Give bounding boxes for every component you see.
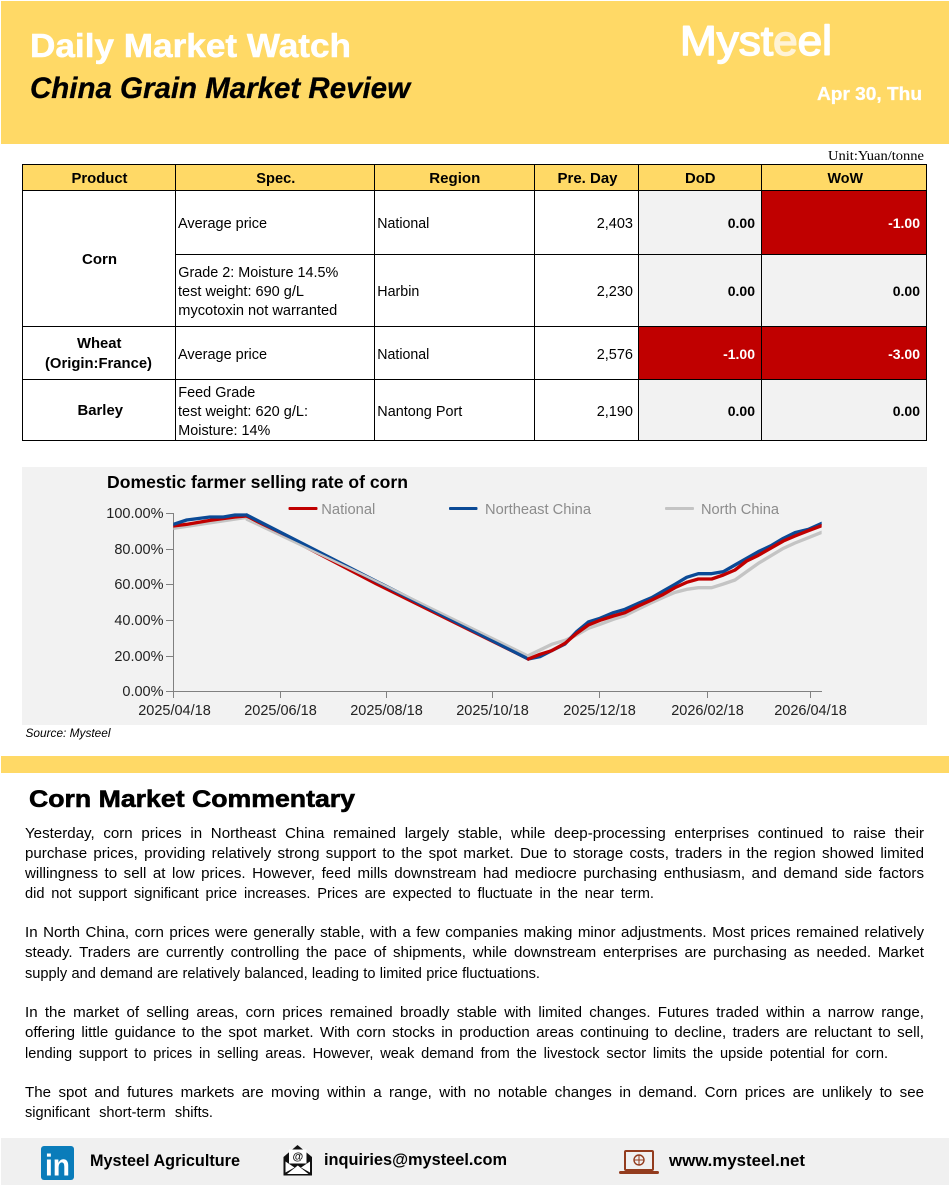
spec column: test weight: 620 g/L: bbox=[178, 404, 308, 420]
y axis labels: 0.00% bbox=[122, 684, 164, 700]
x axis labels: 2025/04/18 bbox=[138, 703, 211, 719]
yellow divider band bbox=[1, 756, 949, 773]
product column bbox=[45, 252, 152, 419]
website address: www.mysteel.net bbox=[668, 1152, 806, 1170]
table header row: Region bbox=[429, 171, 480, 187]
spec column: test weight: 690 g/L bbox=[178, 284, 304, 300]
line: North China, recovery bbox=[528, 532, 822, 656]
chart lines bbox=[173, 515, 822, 659]
line: National, recovery bbox=[528, 526, 822, 659]
commentary text: did not support significant price increases. Prices are expected to fluctuate in the near term. bbox=[25, 886, 654, 902]
day on day changes: -1.00 bbox=[723, 346, 755, 362]
commentary text: In North China, corn prices were generally stable, with a few companies making minor adjustments. Most prices remained relatively bbox=[25, 924, 924, 941]
icon: email envelope bbox=[284, 1145, 312, 1176]
date: Apr 30, Thu bbox=[817, 83, 922, 104]
spec column: mycotoxin not warranted bbox=[178, 303, 337, 319]
spec column: Grade 2: Moisture 14.5% bbox=[178, 265, 338, 281]
day on day changes: 0.00 bbox=[728, 403, 755, 419]
table header row: Pre. Day bbox=[558, 171, 618, 187]
chart legend: National bbox=[321, 502, 375, 518]
line: National, early section bbox=[173, 516, 247, 526]
chart legend: North China bbox=[701, 502, 780, 518]
commentary text: significant short-term shifts. bbox=[25, 1105, 213, 1121]
chart title: Domestic farmer selling rate of corn bbox=[107, 472, 408, 492]
price table bbox=[22, 164, 926, 440]
unit note: Unit:Yuan/tonne bbox=[828, 149, 924, 164]
day on day changes bbox=[723, 215, 755, 419]
footer bar bbox=[1, 1138, 949, 1185]
line: North China, early section bbox=[173, 517, 247, 528]
region column: Harbin bbox=[377, 284, 419, 300]
commentary text: purchase prices, providing relatively strong support to the spot market. Due to storage costs, traders in the region showed limited bbox=[25, 845, 924, 862]
commentary text: In the market of selling areas, corn prices remained broadly stable with limited changes. Futures traded within a narrow range, bbox=[25, 1004, 924, 1021]
table header row: Product bbox=[72, 171, 128, 187]
commentary text: supply and demand are relatively balanced, leading to limited price fluctuations. bbox=[25, 966, 540, 982]
x axis labels: 2025/08/18 bbox=[350, 703, 423, 719]
y axis labels: 60.00% bbox=[114, 577, 164, 593]
region column bbox=[377, 216, 462, 420]
line: Northeast China, early section bbox=[173, 515, 247, 524]
table header row: WoW bbox=[828, 171, 863, 187]
x axis labels: 2026/04/18 bbox=[774, 703, 847, 719]
commentary text: lending support to prices in selling areas. However, weak demand from the livestock sector limits the upside potential for corn. bbox=[25, 1046, 888, 1062]
chart legend: Northeast China bbox=[485, 502, 592, 518]
subtitle: China Grain Market Review: China Grain Market Review bbox=[30, 72, 412, 105]
table header row: Spec. bbox=[256, 171, 295, 187]
x axis labels: 2025/12/18 bbox=[563, 703, 636, 719]
header banner bbox=[1, 1, 949, 144]
x axis labels bbox=[138, 703, 847, 719]
email address: inquiries@mysteel.com bbox=[324, 1151, 507, 1169]
region column: Nantong Port bbox=[377, 404, 462, 420]
product column: Barley bbox=[78, 403, 123, 419]
line: North China, decline bbox=[247, 520, 528, 656]
week on week changes bbox=[888, 215, 920, 419]
product column: Corn bbox=[82, 252, 117, 268]
week on week changes: 0.00 bbox=[893, 403, 920, 419]
panel: corn selling rate chart bbox=[22, 467, 927, 725]
LinkedIn label: Mysteel Agriculture bbox=[90, 1152, 240, 1170]
chart axes bbox=[166, 513, 822, 698]
icon: LinkedIn: in bbox=[45, 1148, 70, 1182]
spec column: Average price bbox=[178, 216, 267, 232]
spec column: Moisture: 14% bbox=[178, 423, 270, 439]
icon: email envelope: @ bbox=[292, 1151, 304, 1163]
region column: National bbox=[377, 347, 429, 363]
commentary text: steady. Traders are currently controlling the pace of shipments, while downstream enterprises are purchasing as needed. Market bbox=[25, 944, 924, 961]
x axis labels: 2025/10/18 bbox=[456, 703, 529, 719]
line: National, decline bbox=[247, 516, 528, 659]
previous day prices: 2,230 bbox=[597, 284, 633, 300]
x axis labels: 2026/02/18 bbox=[671, 703, 744, 719]
week on week changes: 0.00 bbox=[893, 283, 920, 299]
y axis labels bbox=[106, 506, 164, 700]
previous day prices: 2,576 bbox=[597, 347, 633, 363]
commentary text: The spot and futures markets are moving within a range, with no notable changes in demand. Corn prices are unlikely to see bbox=[25, 1084, 924, 1101]
y axis labels: 20.00% bbox=[114, 649, 164, 665]
day on day changes: 0.00 bbox=[728, 215, 755, 231]
y axis labels: 80.00% bbox=[114, 542, 164, 558]
day on day changes: 0.00 bbox=[728, 283, 755, 299]
region column: National bbox=[377, 216, 429, 232]
table header row bbox=[22, 164, 926, 190]
y axis labels: 40.00% bbox=[114, 613, 164, 629]
product column: (Origin:France) bbox=[45, 356, 152, 372]
chart legend bbox=[288, 502, 780, 518]
table header row: DoD bbox=[685, 171, 716, 187]
line: Northeast China, recovery bbox=[528, 523, 822, 659]
title: Daily Market Watch: Daily Market Watch bbox=[30, 27, 351, 64]
spec column: Average price bbox=[178, 347, 267, 363]
change cell backgrounds bbox=[638, 190, 926, 440]
chart source: Source: Mysteel bbox=[26, 726, 111, 740]
previous day prices bbox=[597, 216, 633, 420]
commentary text: willingness to sell at low prices. However, feed mills downstream had mediocre purchasing enthusiasm, and demand side factors bbox=[25, 865, 924, 882]
icon: website laptop bbox=[620, 1151, 658, 1174]
y axis labels: 100.00% bbox=[106, 506, 164, 522]
spec column: Feed Grade bbox=[178, 385, 255, 401]
commentary text: offering little guidance to the spot market. With corn stocks in production areas continuing to decline, traders are reluctant to sell, bbox=[25, 1024, 924, 1041]
previous day prices: 2,403 bbox=[597, 216, 633, 232]
week on week changes: -3.00 bbox=[888, 346, 920, 362]
spec column bbox=[178, 216, 338, 439]
x axis labels: 2025/06/18 bbox=[244, 703, 317, 719]
product column: Wheat bbox=[77, 336, 122, 352]
week on week changes: -1.00 bbox=[888, 215, 920, 231]
commentary heading: Corn Market Commentary bbox=[29, 786, 356, 813]
commentary text: Yesterday, corn prices in Northeast China remained largely stable, while deep-processing enterprises continued to raise their bbox=[25, 825, 924, 842]
logo: Mysteel: Mysteel bbox=[680, 17, 832, 64]
previous day prices: 2,190 bbox=[597, 404, 633, 420]
line: Northeast China, decline bbox=[247, 515, 528, 659]
